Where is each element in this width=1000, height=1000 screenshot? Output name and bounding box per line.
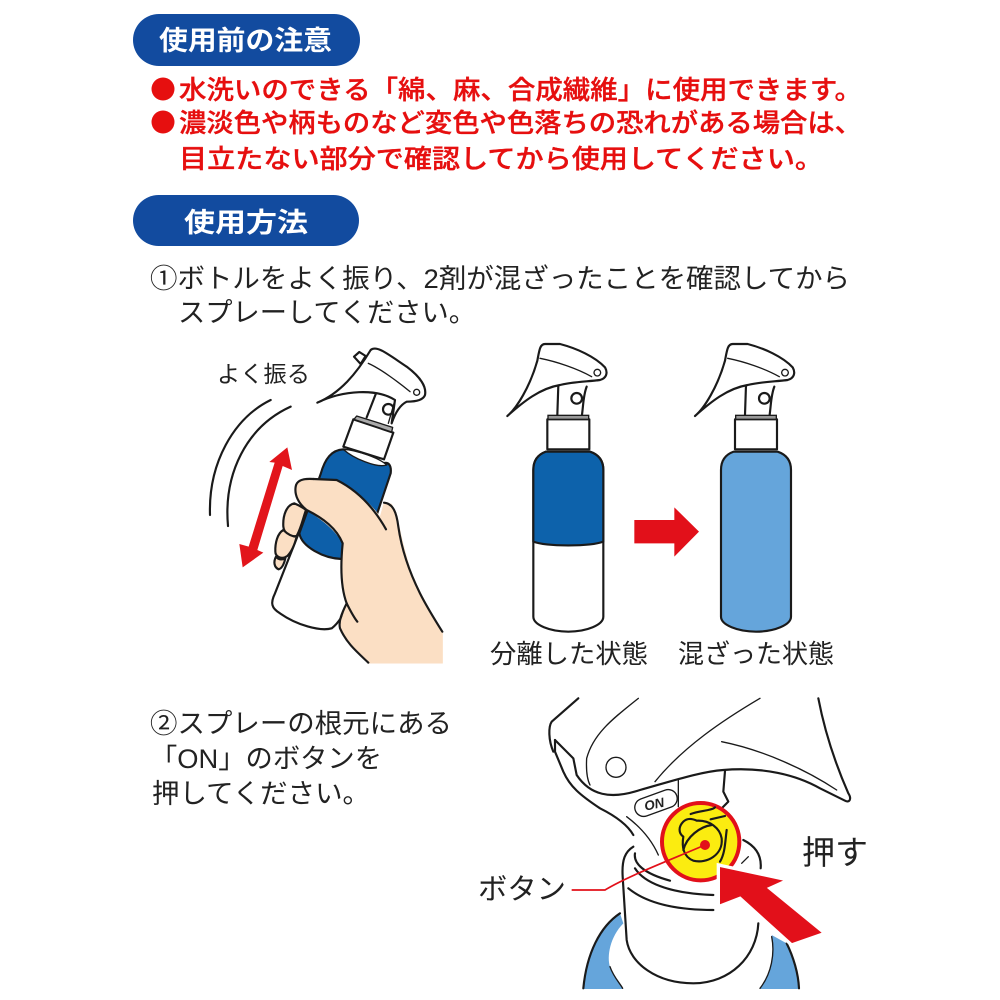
bottle: mixed (695, 344, 794, 632)
text block: step 1: ①ボトルをよく振り、2剤が混ざったことを確認してから (150, 264, 850, 294)
text block: step 2: 押してください。 (152, 779, 370, 809)
bottle: separated (507, 344, 607, 632)
hand (274, 479, 443, 663)
heading: before use (133, 14, 360, 66)
heading: how to use (133, 195, 359, 246)
text block: step 1: スプレーしてください。 (178, 298, 476, 328)
illustration: hand shaking bottle (210, 349, 443, 663)
label: press: 押す (802, 834, 868, 871)
neck and trigger (317, 349, 425, 459)
icon: red double arrow (239, 447, 292, 567)
text block: step 2: ②スプレーの根元にある (150, 709, 452, 739)
text block: cautions (152, 75, 862, 174)
label: mixed state: 混ざった状態 (678, 639, 834, 669)
bottle neck (622, 840, 761, 983)
shaken bottle (272, 449, 391, 629)
text block: step 1 (150, 264, 850, 328)
heading: before use: 使用前の注意 (159, 26, 332, 56)
illustration: spray close-up (549, 698, 850, 989)
label: ON badge: ON (643, 795, 666, 814)
bottle shoulder (583, 913, 799, 989)
icon: red arrow right (634, 507, 699, 557)
label: button: ボタン (478, 874, 566, 906)
text block: step 2 (150, 709, 452, 809)
text block: cautions: 目立たない部分で確認してから使用してください。 (179, 144, 823, 174)
label: ON badge (632, 787, 680, 819)
label: separated state: 分離した状態 (490, 639, 648, 669)
motion lines (210, 400, 291, 526)
illustration: separated and mixed bottles (507, 344, 794, 632)
callout line: button (572, 840, 710, 890)
icon: highlighted button (662, 803, 739, 880)
heading: how to use: 使用方法 (184, 208, 308, 238)
text block: cautions: 水洗いのできる「綿、麻、合成繊維」に使用できます。 (179, 75, 862, 105)
icon: big red arrow (718, 865, 825, 945)
trigger outline (549, 698, 850, 855)
text block: step 2: 「ON」のボタンを (150, 744, 382, 774)
text block: cautions: 濃淡色や柄ものなど変色や色落ちの恐れがある場合は、 (179, 108, 862, 138)
label: shake well: よく振る (217, 361, 310, 387)
